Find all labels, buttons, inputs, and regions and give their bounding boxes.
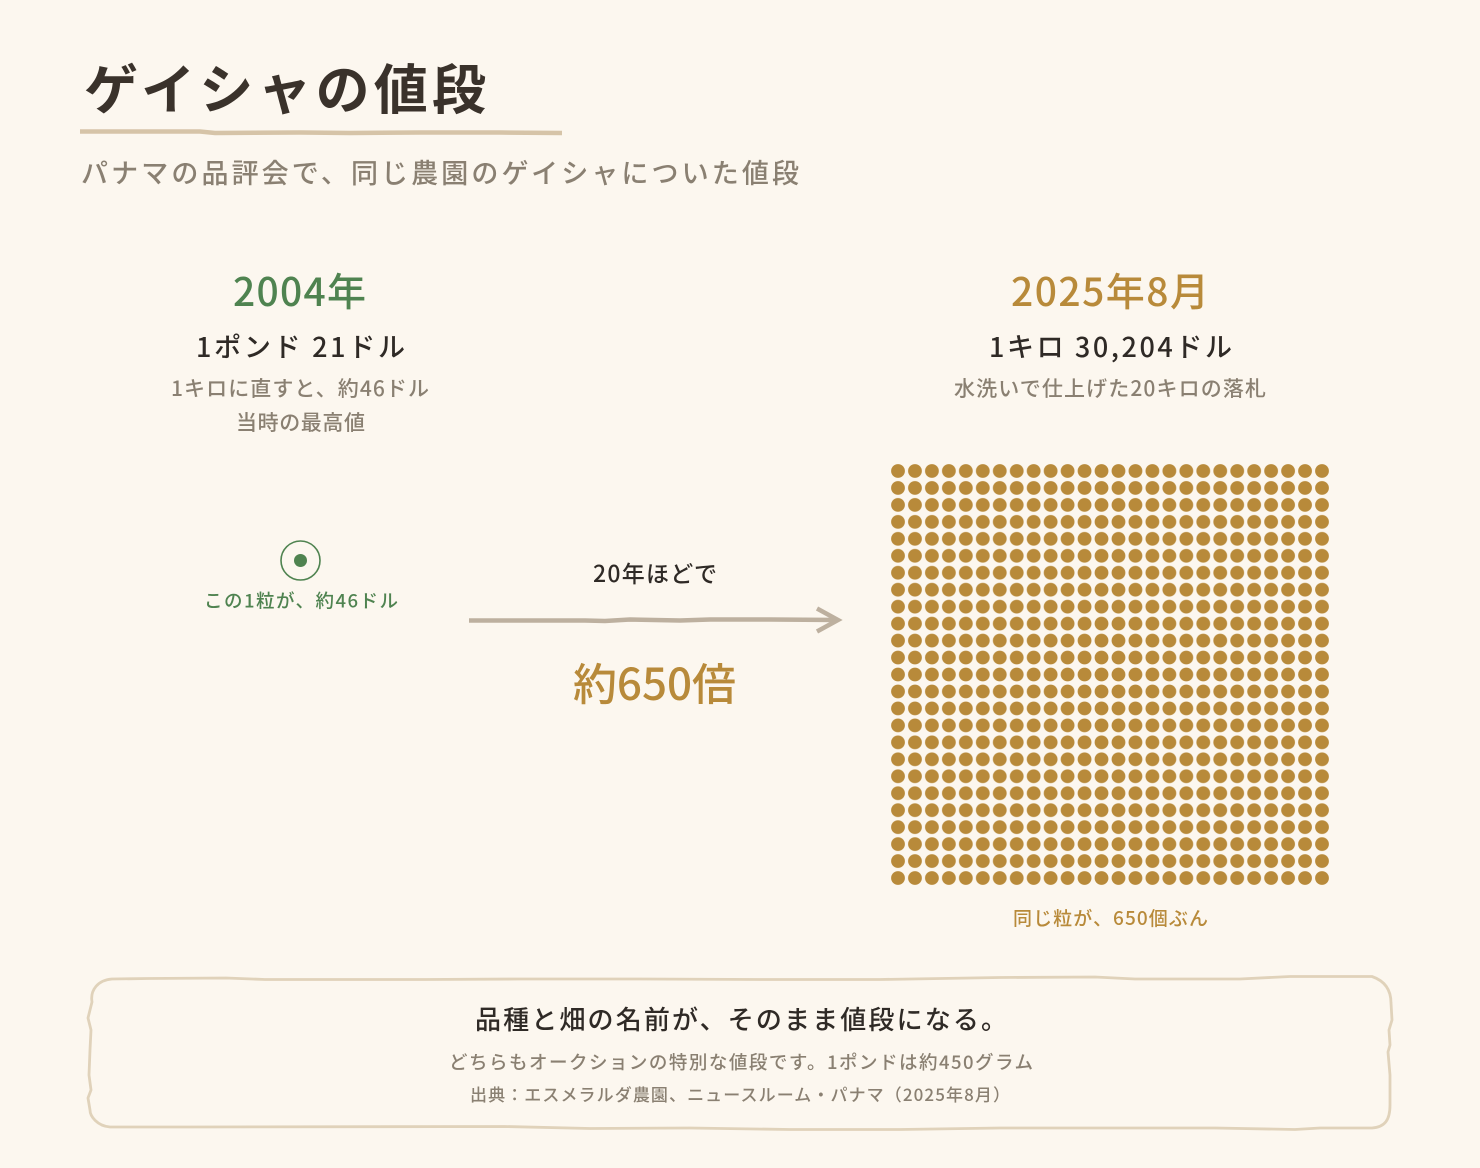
panel: 2004 <box>171 262 429 614</box>
hand-drawn frame <box>88 976 1392 1130</box>
note: highest price: 当時の最高値 <box>236 407 365 437</box>
note: lot: 水洗いで仕上げた20キロの落札 <box>954 373 1266 403</box>
label: about 20 years: 20年ほどで <box>593 555 717 589</box>
panel: change <box>469 555 838 713</box>
note: per kilo: 1キロに直すと、約46ドル <box>171 373 429 403</box>
source: 出典：エスメラルダ農園、ニュースルーム・パナマ（2025年8月） <box>470 1081 1010 1106</box>
multiplier: 約650倍 <box>573 649 736 713</box>
price 2025: 1キロ 30,204ドル <box>989 326 1232 365</box>
bean caption: この1粒が、約46ドル <box>204 588 398 614</box>
takeaway note: どちらもオークションの特別な値段です。1ポンドは約450グラム <box>449 1049 1033 1075</box>
price 2004: 1ポンド 21ドル <box>196 326 405 365</box>
subtitle: パナマの品評会で、同じ農園のゲイシャについた値段 <box>81 152 799 191</box>
panel: takeaway <box>88 976 1392 1130</box>
year 2004: 2004年 <box>233 262 366 318</box>
title: ゲイシャの値段 <box>84 46 486 125</box>
dot grid: 650 beans <box>891 464 1330 886</box>
icon: single bean <box>281 541 320 580</box>
panel: 2025 <box>891 262 1330 931</box>
title underline <box>80 132 562 133</box>
grid caption: 同じ粒が、650個ぶん <box>1013 904 1208 931</box>
year 2025: 2025年8月 <box>1011 262 1209 318</box>
takeaway heading: 品種と畑の名前が、そのまま値段になる。 <box>475 1000 1007 1037</box>
arrow <box>469 608 838 632</box>
